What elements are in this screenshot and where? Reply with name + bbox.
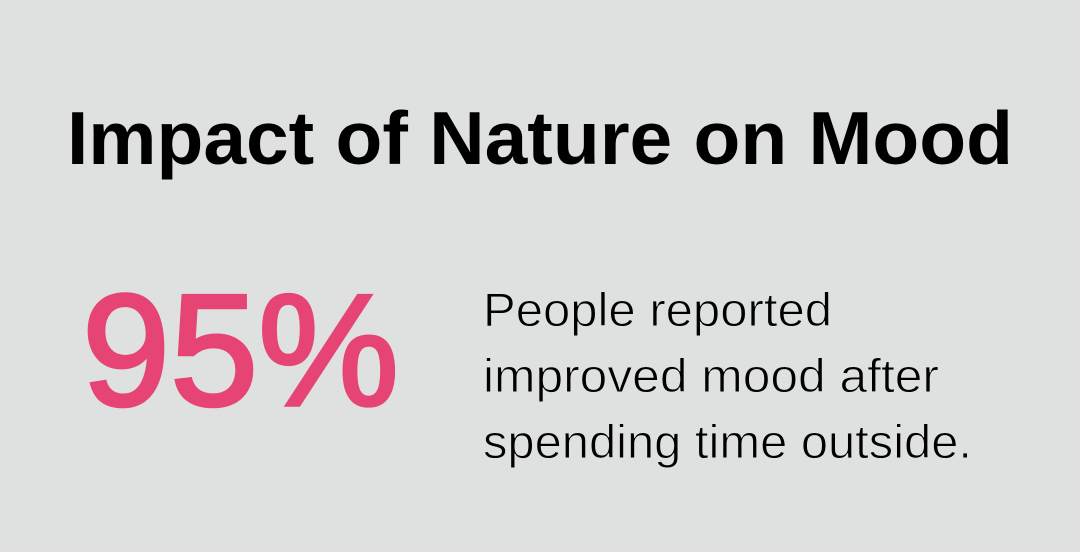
title: Impact of Nature on Mood — [67, 96, 1013, 180]
description text: spending time outside. — [483, 415, 972, 468]
statistic: 95%: 95% — [82, 261, 399, 439]
description text: People reported — [483, 283, 832, 336]
description text: improved mood after — [483, 349, 939, 402]
description text — [483, 283, 972, 468]
